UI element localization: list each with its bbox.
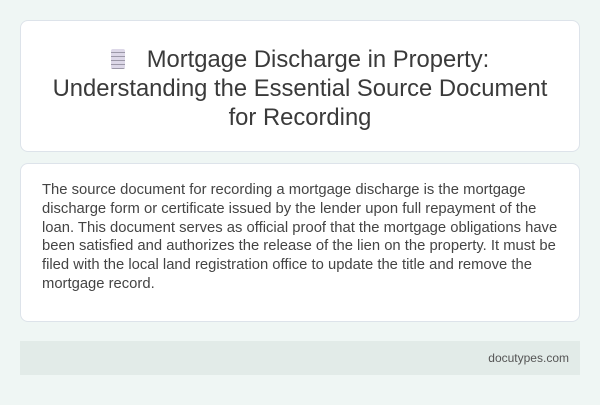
text block: The source document for recording a mortgage discharge is the mortgage [42,182,526,198]
panel: title card [20,20,580,152]
title [53,46,548,131]
text block: loan. This document serves as official proof that the mortgage obligations have [42,220,557,236]
text block: mortgage record. [42,276,155,292]
title: Mortgage Discharge in Property: [147,46,489,73]
text block: discharge form or certificate issued by the lender upon full repayment of the [42,201,536,217]
panel: description [20,163,580,322]
icon: document [111,49,125,69]
text block [42,182,557,292]
footer text: docutypes.com [488,351,569,365]
text block: filed with the local land registration office to update the title and remove the [42,257,532,273]
text block: been satisfied and authorizes the release of the lien on the property. It must be [42,238,556,254]
footer bar [20,341,580,375]
title: Understanding the Essential Source Document [53,75,547,102]
title: for Recording [229,104,371,131]
